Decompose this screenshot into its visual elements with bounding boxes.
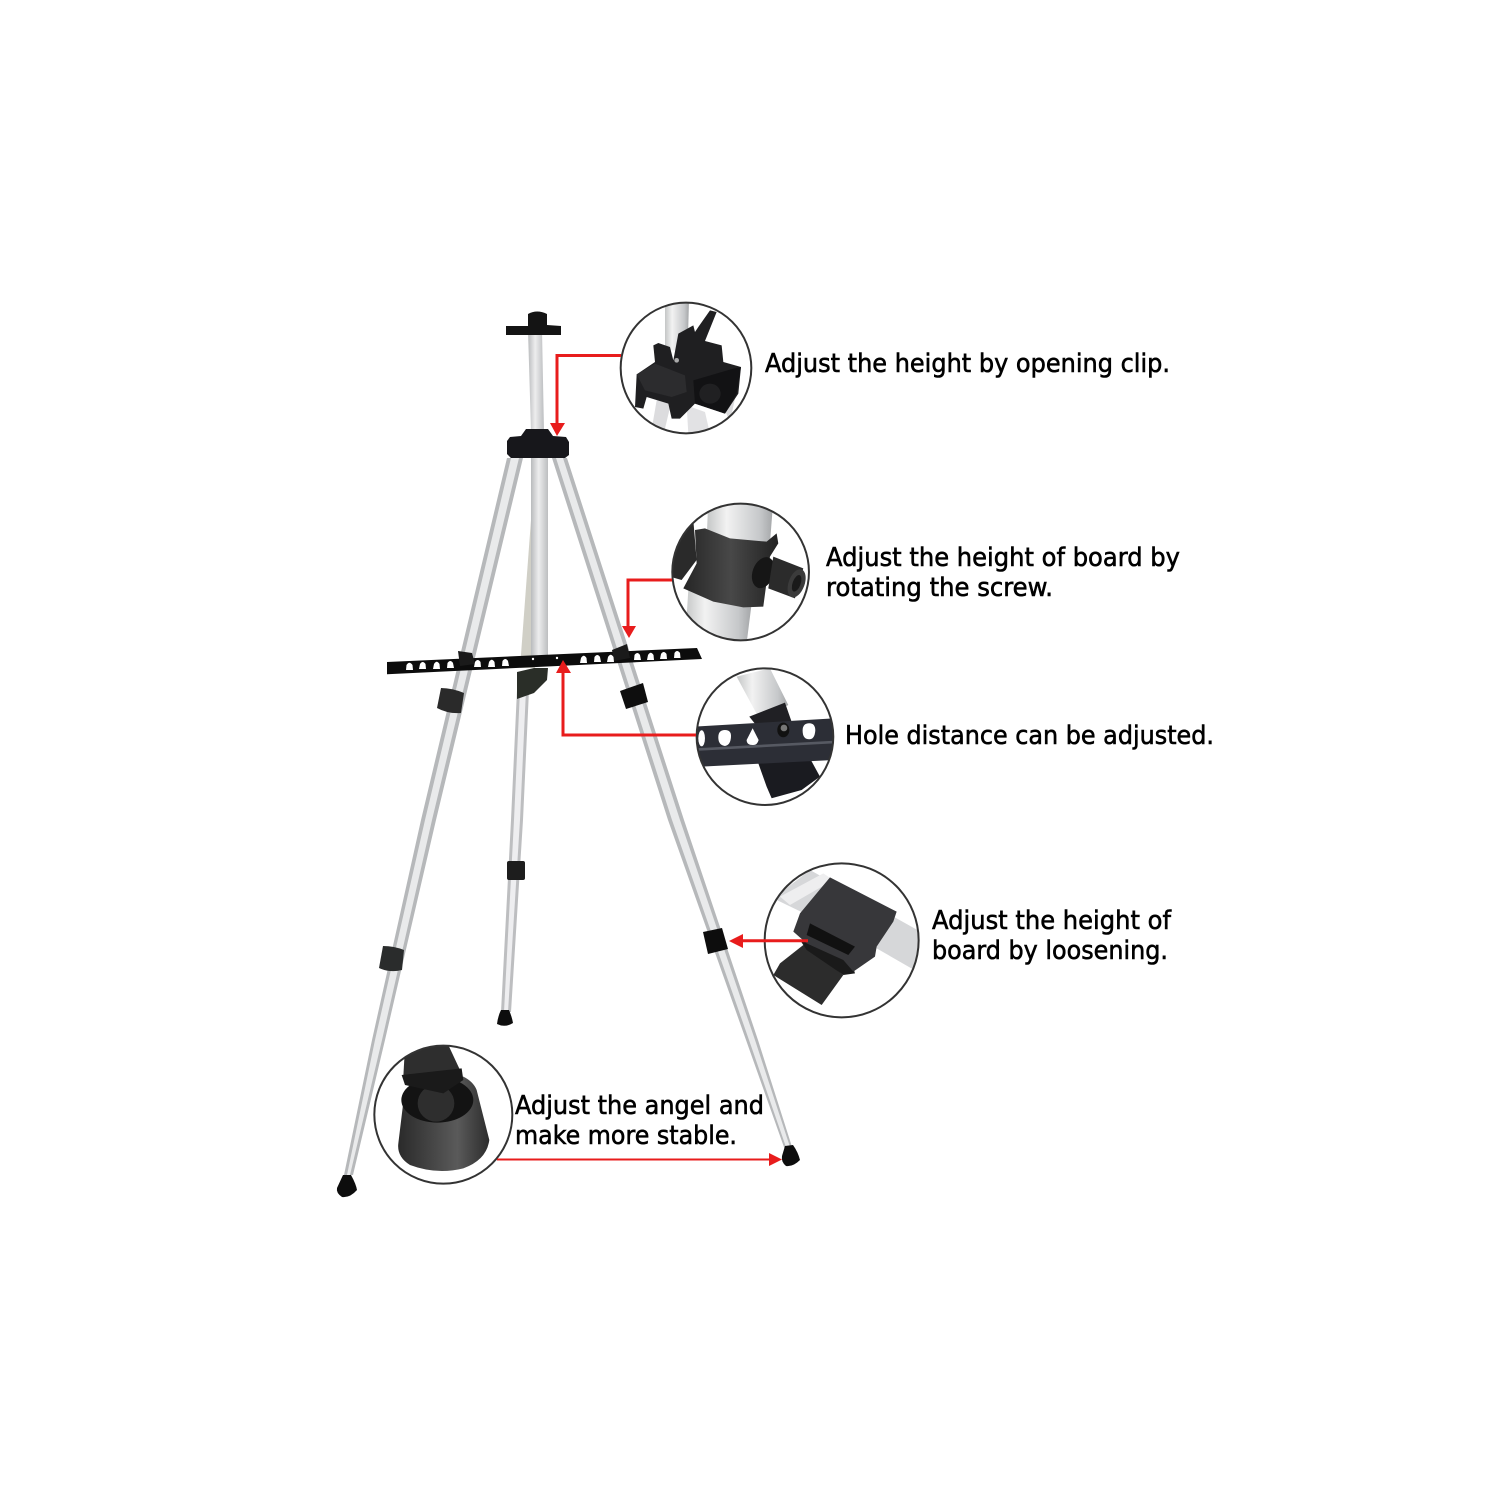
tray bracket [517, 668, 548, 699]
left leg [344, 458, 523, 1175]
arrow: foot detail to foot [497, 1153, 782, 1166]
centre mast [531, 458, 548, 663]
rubber feet [337, 1010, 800, 1197]
detail circle: screw collar [670, 500, 810, 643]
label: angle and stability [515, 1091, 764, 1151]
detail circle: rubber foot [373, 1045, 513, 1185]
label: loosening: board by loosening. [932, 936, 1168, 966]
rear leg [501, 520, 537, 1012]
arrow: buckle to clamp [729, 934, 808, 948]
label: rotating screw: Adjust the height of board by [826, 543, 1180, 573]
label: hole distance: Hole distance can be adjusted. [845, 721, 1214, 751]
detail circle: keyhole bar [693, 667, 837, 807]
leg clamps [379, 683, 728, 971]
label: angle and stability: Adjust the angel and [515, 1091, 764, 1121]
arrow: clip to hub [550, 356, 621, 436]
label: loosening [932, 906, 1172, 966]
tray bar [387, 644, 702, 674]
label: rotating screw [826, 543, 1180, 603]
label: rotating screw: rotating the screw. [826, 573, 1053, 603]
upper mast [528, 330, 544, 432]
hub [507, 429, 569, 458]
arrow: screw to leg [622, 580, 672, 638]
label: angle and stability: make more stable. [515, 1121, 737, 1151]
label: loosening: Adjust the height of [932, 906, 1172, 936]
easel tripod [337, 312, 800, 1197]
detail circle: top clip [618, 300, 755, 437]
arrow: holes to tray [556, 660, 696, 735]
label: opening clip: Adjust the height by opening clip. [765, 349, 1170, 379]
right leg [552, 458, 793, 1150]
detail circle: buckle [763, 862, 923, 1020]
top clip [506, 312, 561, 335]
